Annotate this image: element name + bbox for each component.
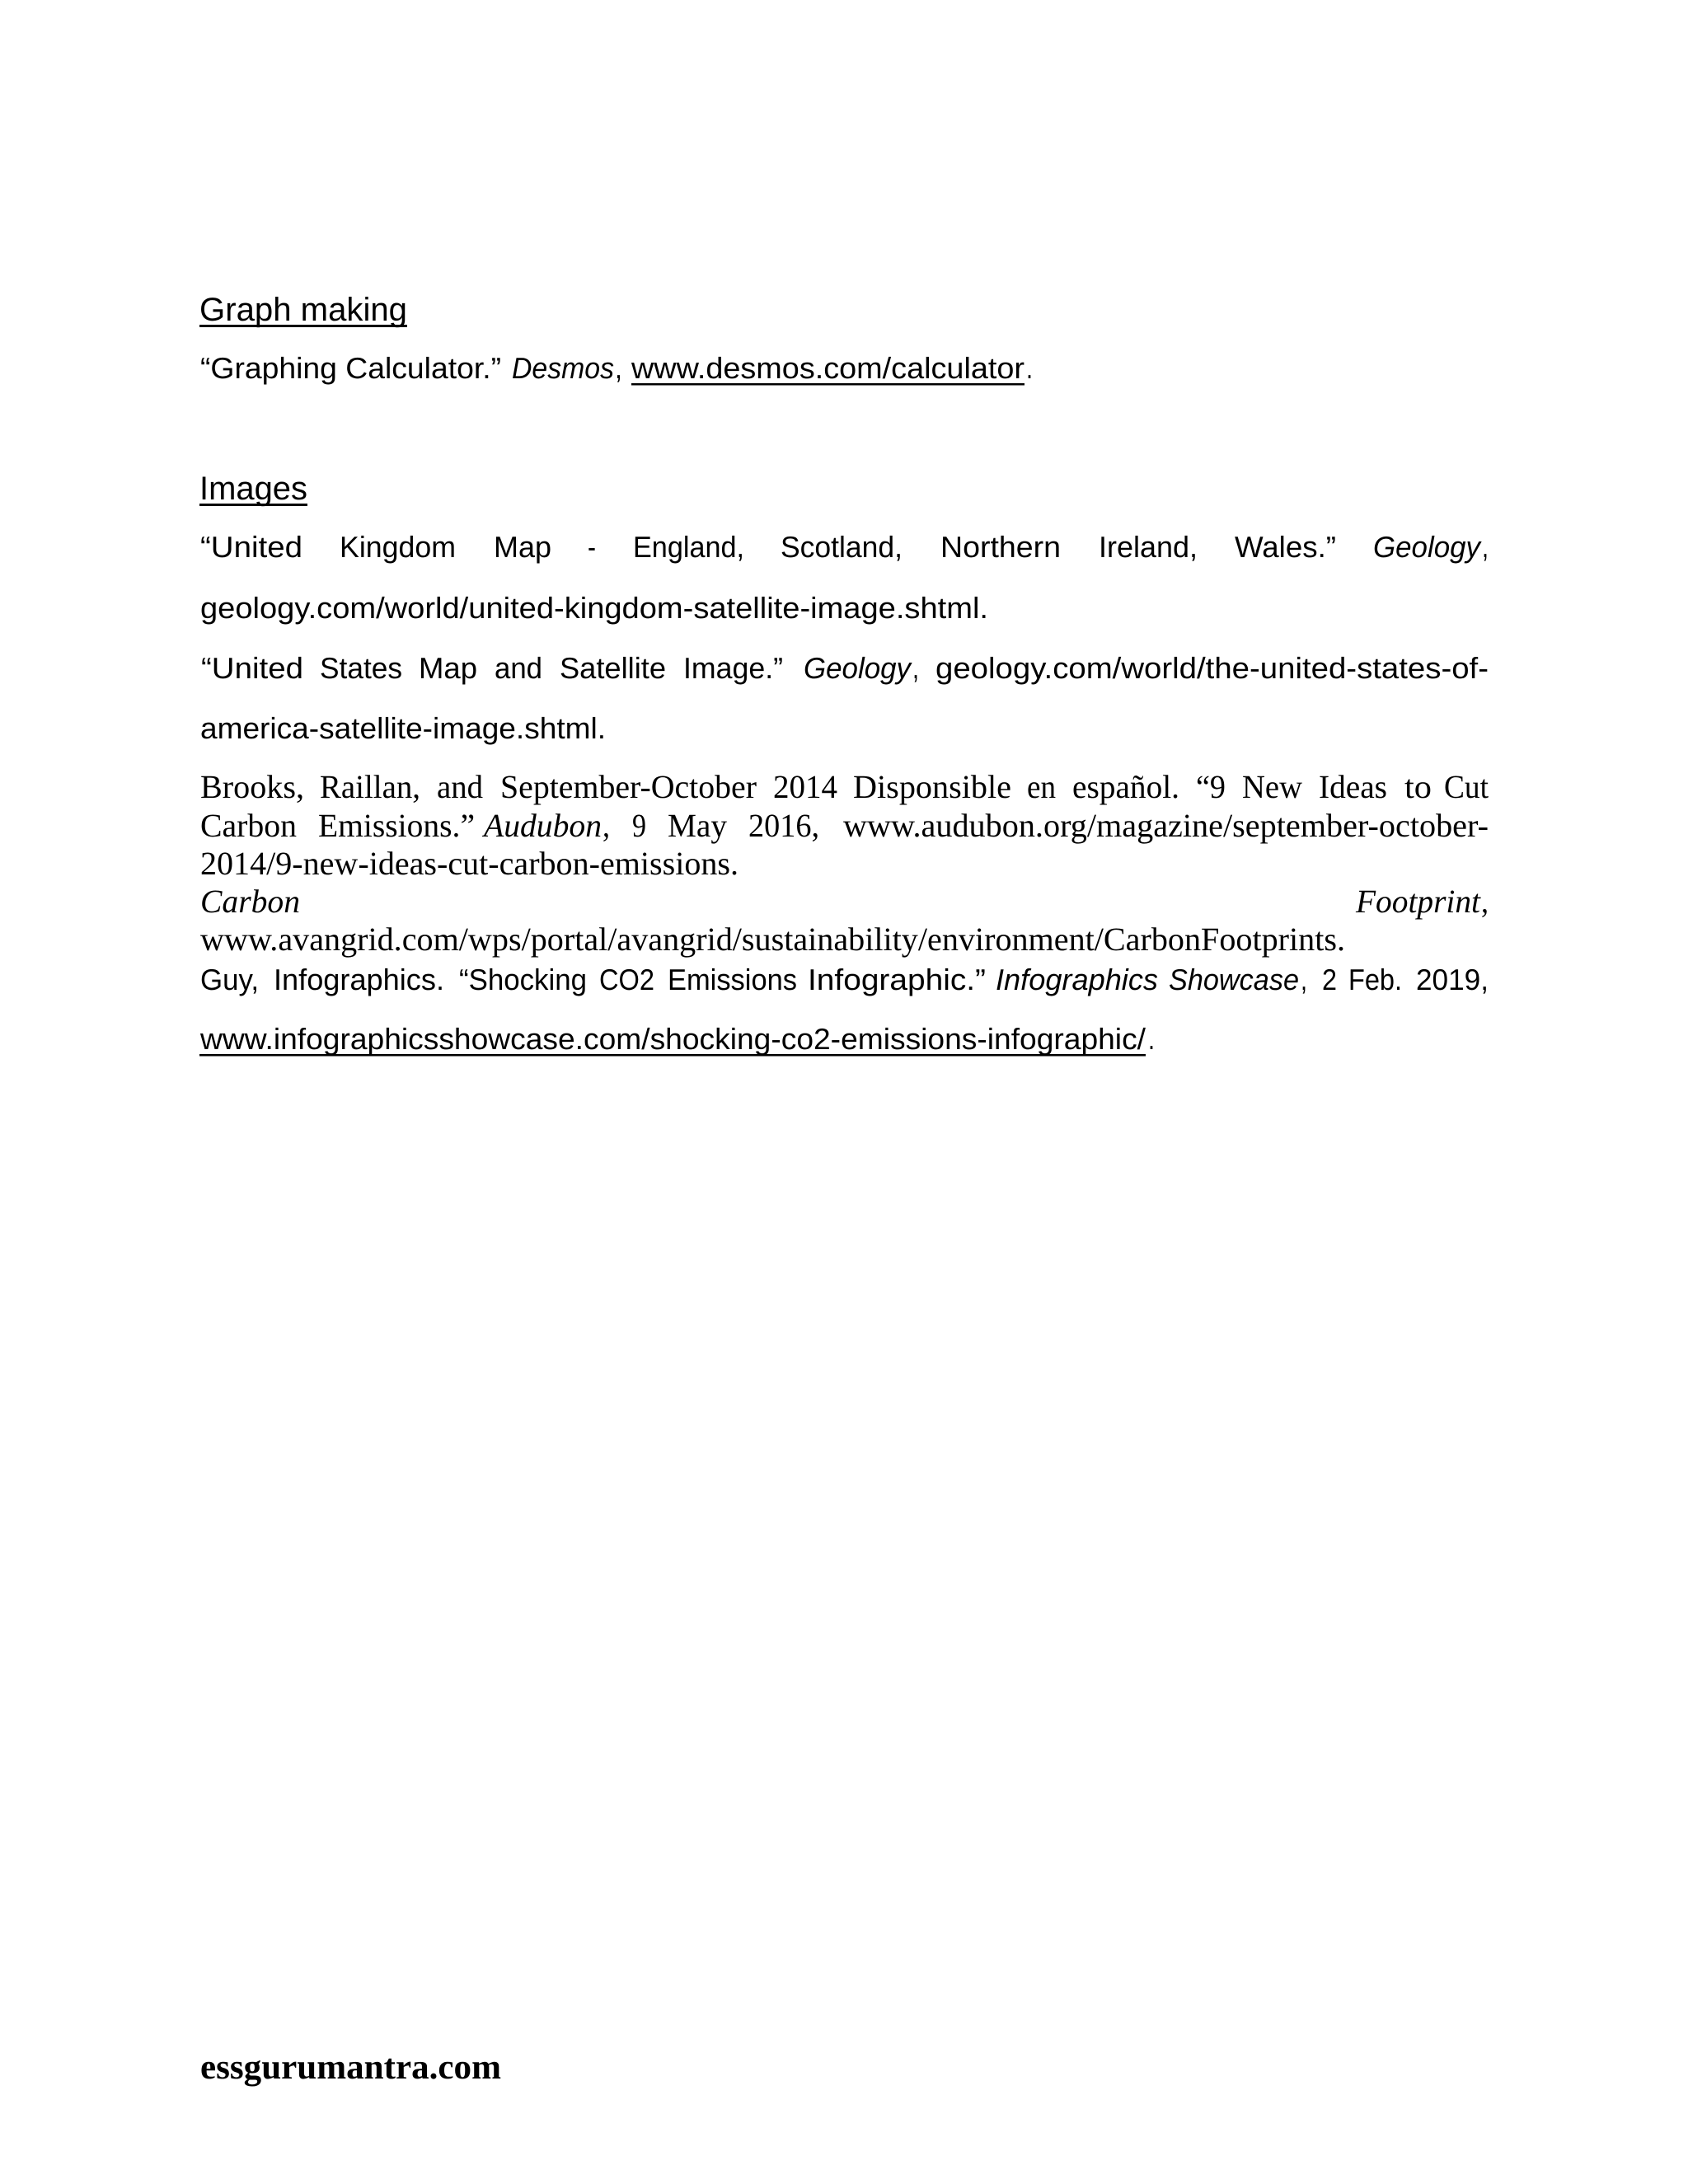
citation: United States map: “United	[201, 651, 303, 685]
citation: Avangrid carbon footprint: Carbon	[200, 883, 300, 920]
citation: Shocking CO2 emissions infographic: www.infographicsshowcase.com/shocking-co2-emissions-infographic/	[199, 1022, 1146, 1056]
citation: Audubon new ideas to cut carbon emissions: Audubon	[481, 807, 602, 844]
citation: Audubon new ideas to cut carbon emissions: www.audubon.org/magazine/september-october-	[843, 807, 1489, 844]
citation: Audubon new ideas to cut carbon emissions: 2016,	[748, 807, 819, 844]
citation: Desmos graphing calculator	[200, 351, 1033, 386]
citation: Shocking CO2 emissions infographic: CO2	[599, 963, 654, 996]
citation: Shocking CO2 emissions infographic: Emissions	[668, 963, 797, 996]
citation: Audubon new ideas to cut carbon emissions: May	[668, 807, 727, 844]
citation: United Kingdom map: “United	[200, 530, 302, 564]
citation: Audubon new ideas to cut carbon emissions: Raillan,	[320, 768, 420, 805]
citation: Avangrid carbon footprint: ,	[1481, 883, 1489, 920]
citation: Shocking CO2 emissions infographic: “Shocking	[459, 963, 587, 996]
citation: Audubon new ideas to cut carbon emissions: and	[437, 768, 483, 805]
citation: United States map: and	[495, 651, 542, 685]
citation: United Kingdom map: England,	[633, 530, 744, 564]
citation: United Kingdom map: -	[588, 530, 596, 564]
citation: Audubon new ideas to cut carbon emissions: 2014/9-new-ideas-cut-carbon-emissions.	[200, 845, 738, 882]
citation: Shocking CO2 emissions infographic	[199, 963, 1489, 1057]
citation: United Kingdom map: Scotland,	[781, 530, 903, 564]
citation: United States map: Satellite	[560, 651, 666, 685]
citation: United States map: geology.com/world/the-united-states-of-	[935, 651, 1489, 685]
citation: Shocking CO2 emissions infographic: 2019,	[1416, 963, 1489, 996]
citation: Desmos graphing calculator: “Graphing Calculator.”	[200, 351, 501, 385]
citation: Audubon new ideas to cut carbon emissions: español.	[1072, 768, 1179, 805]
heading: Images: Images	[199, 471, 307, 507]
citation: Audubon new ideas to cut carbon emissions: Carbon	[200, 807, 297, 844]
citation: Audubon new ideas to cut carbon emissions: to	[1404, 768, 1432, 805]
citation: Shocking CO2 emissions infographic: Feb.	[1348, 963, 1402, 996]
citation: United States map: Map	[419, 651, 477, 685]
citation: Audubon new ideas to cut carbon emissions	[200, 768, 1489, 882]
citation: Audubon new ideas to cut carbon emissions: ,	[603, 807, 610, 844]
citation: United Kingdom map: Ireland,	[1099, 530, 1198, 564]
citation: United Kingdom map: geology.com/world/united-kingdom-satellite-image.shtml.	[200, 591, 988, 625]
citation: Shocking CO2 emissions infographic: 2	[1322, 963, 1337, 996]
citation: United States map	[200, 651, 1489, 745]
citation: United States map: Image.”	[683, 651, 783, 685]
citation: United States map: States	[320, 651, 402, 685]
citation: Desmos graphing calculator: www.desmos.com/calculator	[631, 351, 1025, 385]
citation: Avangrid carbon footprint	[200, 883, 1489, 958]
citation: Audubon new ideas to cut carbon emissions: “9	[1196, 768, 1226, 805]
citation: United States map: Geology	[804, 651, 912, 685]
citation: Desmos graphing calculator: ,	[615, 351, 622, 385]
citation: Shocking CO2 emissions infographic: ,	[1301, 963, 1307, 996]
citation: United Kingdom map: Kingdom	[340, 530, 456, 564]
citation: Audubon new ideas to cut carbon emissions: Brooks,	[200, 768, 304, 805]
citation: United Kingdom map	[200, 530, 1489, 625]
citation: United Kingdom map: Wales.”	[1235, 530, 1336, 564]
citation: Shocking CO2 emissions infographic: Infographic.”	[808, 963, 986, 996]
citation: Avangrid carbon footprint: www.avangrid.com/wps/portal/avangrid/sustainability/environment/CarbonFootprints.	[200, 921, 1345, 958]
citation: Audubon new ideas to cut carbon emissions: Emissions.”	[318, 807, 475, 844]
citation: United Kingdom map: ,	[1482, 530, 1489, 564]
citation: Avangrid carbon footprint: Footprint	[1355, 883, 1481, 920]
citation: Audubon new ideas to cut carbon emissions: New	[1242, 768, 1302, 805]
citation: Shocking CO2 emissions infographic: Showcase	[1169, 963, 1299, 996]
citation: Audubon new ideas to cut carbon emissions: September-October	[500, 768, 757, 805]
citation: Audubon new ideas to cut carbon emissions: 9	[632, 807, 646, 844]
citation: United Kingdom map: Geology	[1373, 530, 1482, 564]
citation: Audubon new ideas to cut carbon emissions: en	[1027, 768, 1056, 805]
citation: Shocking CO2 emissions infographic: Infographics.	[274, 963, 444, 996]
citation: Shocking CO2 emissions infographic: Guy,	[200, 963, 259, 996]
citation: United Kingdom map: Northern	[940, 530, 1061, 564]
citation: Audubon new ideas to cut carbon emissions: Disponsible	[853, 768, 1011, 805]
citation: United States map: america-satellite-image.shtml.	[200, 711, 606, 745]
citation: Audubon new ideas to cut carbon emissions: Ideas	[1319, 768, 1387, 805]
footer: site name: essgurumantra.com	[200, 2048, 501, 2087]
citation: Desmos graphing calculator: .	[1026, 351, 1033, 385]
citation: United Kingdom map: Map	[494, 530, 551, 564]
citation: Shocking CO2 emissions infographic: .	[1148, 1022, 1155, 1056]
citation: Desmos graphing calculator: Desmos	[512, 351, 614, 385]
heading: Graph making: Graph making	[199, 292, 407, 328]
citation: Shocking CO2 emissions infographic: Infographics	[996, 963, 1158, 996]
citation: Audubon new ideas to cut carbon emissions: Cut	[1444, 768, 1489, 805]
citation: Audubon new ideas to cut carbon emissions: 2014	[773, 768, 837, 805]
citation: United States map: ,	[912, 651, 919, 685]
